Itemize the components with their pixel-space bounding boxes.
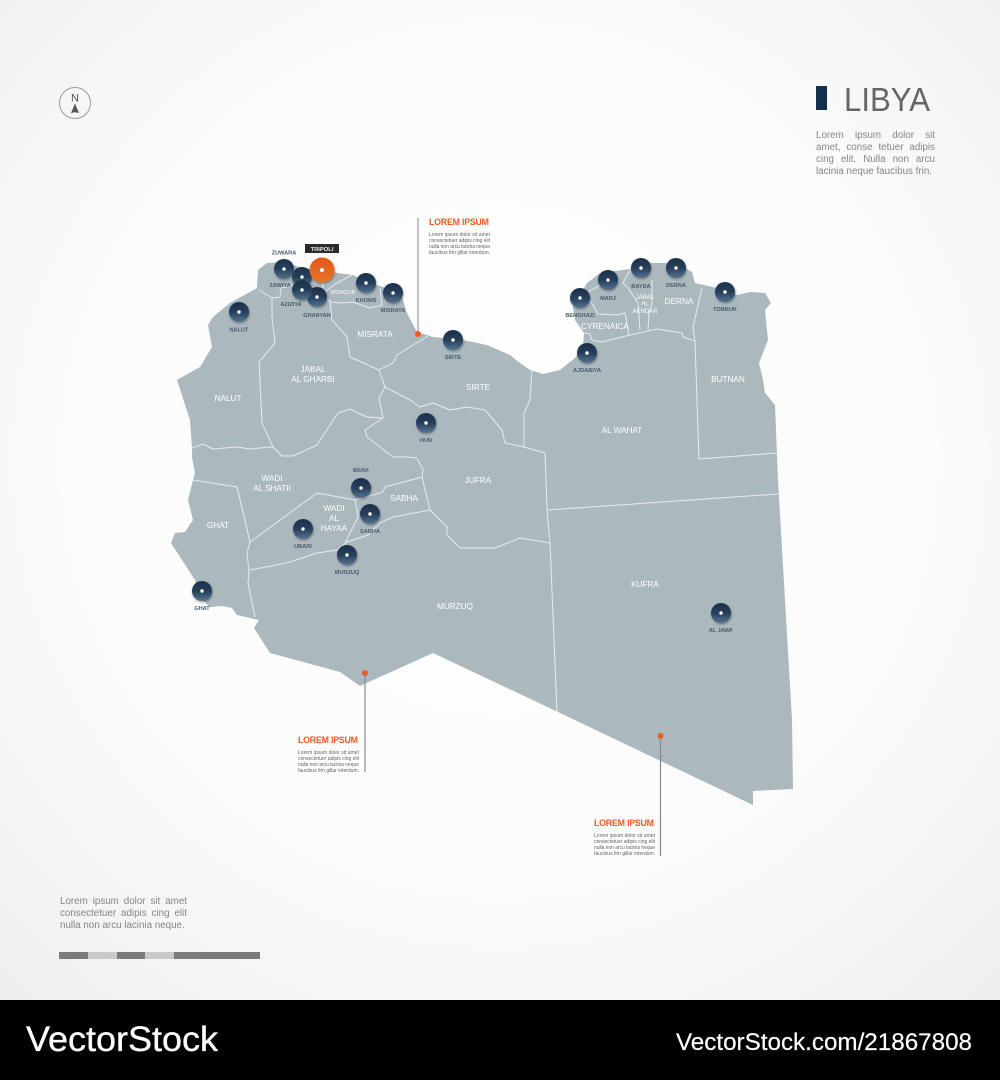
city labels: GHARYAN <box>303 313 331 319</box>
country silhouette <box>171 262 793 805</box>
region borders <box>192 270 778 712</box>
region labels: NALUT <box>215 394 241 403</box>
callout: south-east: LOREM IPSUM <box>594 818 654 828</box>
title: Libya: LIBYA <box>844 81 930 118</box>
region labels: AL SHATII <box>253 484 291 493</box>
region labels: WADI <box>323 504 345 513</box>
intro text block <box>816 130 935 177</box>
city labels: AJDABIYA <box>573 368 601 374</box>
city labels: KHOMS <box>356 298 377 304</box>
callout: north coast: consectetuer adipis cing elit <box>429 238 491 244</box>
map of Libya <box>171 244 793 805</box>
region labels: KUFRA <box>631 580 659 589</box>
city marker centres <box>200 266 727 615</box>
callout: south-west: nulla non arcu lacinia neque <box>298 762 359 768</box>
bottom-left text block: Lorem ipsum dolor sit amet <box>60 896 187 907</box>
callout: north coast: LOREM IPSUM <box>429 217 489 227</box>
bottom-left text block <box>60 896 187 931</box>
bottom-left text block: consectetuer adipis cing elit <box>60 908 187 919</box>
intro text block: Lorem ipsum dolor sit <box>816 130 935 141</box>
intro text block: amet, conse tetuer adipis <box>816 142 935 153</box>
city labels: NALUT <box>230 328 249 334</box>
region labels: AL <box>329 514 339 523</box>
callout: south-west <box>298 670 368 774</box>
region labels: MURQUB <box>331 290 356 296</box>
callout: south-east: nulla non arcu lacinia neque <box>594 845 655 851</box>
city labels: SIRTE <box>445 355 461 361</box>
intro text block: lacinia neque faucibus frin. <box>816 166 932 177</box>
city labels: ZAWIYA <box>269 283 291 289</box>
city labels <box>194 250 737 634</box>
city labels: MURZUQ <box>335 570 360 576</box>
city labels: AZIZIYA <box>280 302 302 308</box>
callout: north coast: Lorem ipsum dolor sit amet <box>429 232 491 238</box>
region labels: CYRENAICA <box>581 322 629 331</box>
region labels: AL <box>641 302 649 308</box>
footer: watermark band: VectorStock <box>26 1020 219 1059</box>
callout: north coast <box>415 217 491 337</box>
callout: south-east: Lorem ipsum dolor sit amet <box>594 833 656 839</box>
footer: watermark band: VectorStock.com/21867808 <box>676 1029 972 1056</box>
callout: south-west: Lorem ipsum dolor sit amet <box>298 750 360 756</box>
callout: south-west: faucibus frin gillar interdum. <box>298 768 359 774</box>
region labels: JABAL <box>636 295 655 301</box>
compass icon <box>60 88 90 118</box>
city labels: HUN <box>420 438 432 444</box>
city labels: MARJ <box>600 296 616 302</box>
city labels: AL JAWF <box>709 628 734 634</box>
city labels: MISRATA <box>381 308 405 314</box>
region labels: AKHDAR <box>632 309 658 315</box>
city labels: ZUWARA <box>272 250 296 256</box>
city labels: DERNA <box>666 283 686 289</box>
bottom-left text block: nulla non arcu lacinia neque. <box>60 920 185 931</box>
callout: south-east <box>594 733 664 857</box>
callout: south-east: consectetuer adipis cing elit <box>594 839 656 845</box>
city labels: BAYDA <box>631 284 651 290</box>
region labels: DERNA <box>665 297 694 306</box>
city labels: BRAK <box>353 468 369 474</box>
footer: watermark band <box>0 1000 1000 1080</box>
region labels: AL GHARBI <box>291 375 335 384</box>
region labels: GHAT <box>207 521 229 530</box>
city markers <box>192 258 735 623</box>
callout: south-west: LOREM IPSUM <box>298 735 358 745</box>
city labels: GHAT <box>194 606 210 612</box>
region labels: HAYAA <box>321 524 348 533</box>
city labels: SABHA <box>360 529 380 535</box>
intro text block: cing elit. Nulla non arcu <box>816 154 935 165</box>
region labels: MISRATA <box>357 330 393 339</box>
callout: south-west: consectetuer adipis cing elit <box>298 756 360 762</box>
region labels: AL WAHAT <box>602 426 642 435</box>
region labels: WADI <box>261 474 283 483</box>
scale bar <box>59 952 260 959</box>
region labels: JUFRA <box>465 476 492 485</box>
region labels: SABHA <box>390 494 418 503</box>
callout: north coast: faucibus frin gillar interdum. <box>429 250 490 256</box>
region labels: SIRTE <box>466 383 491 392</box>
region labels <box>207 290 745 611</box>
capital label: Tripoli <box>305 244 339 253</box>
capital label: Tripoli: TRIPOLI <box>311 247 334 253</box>
city labels: UBARI <box>294 544 312 550</box>
region labels: JABAL <box>300 365 326 374</box>
callout: north coast: nulla non arcu lacinia neque <box>429 244 490 250</box>
callout: south-east: faucibus frin gillar interdum. <box>594 851 655 857</box>
region labels: MURZUQ <box>437 602 473 611</box>
city labels: TOBRUK <box>713 307 737 313</box>
region labels: BUTNAN <box>711 375 745 384</box>
compass icon: N <box>71 92 79 104</box>
city labels: BENGHAZI <box>565 313 595 319</box>
